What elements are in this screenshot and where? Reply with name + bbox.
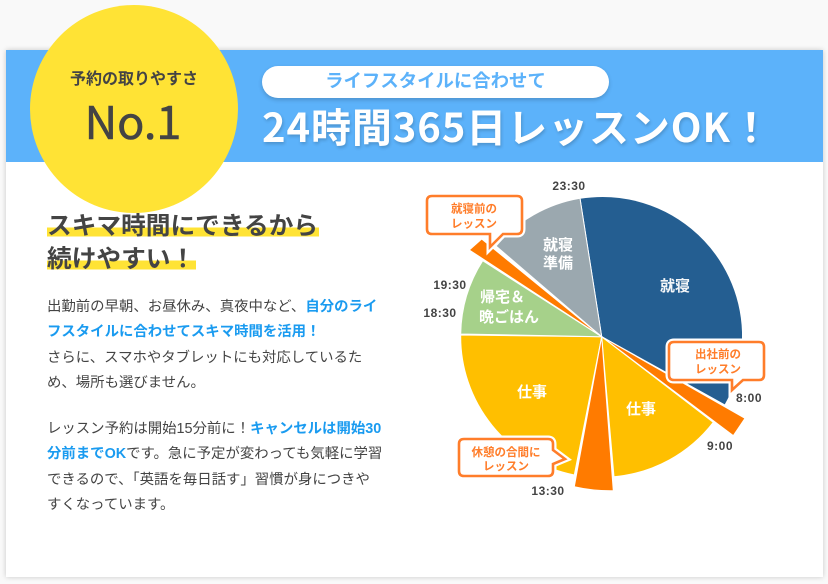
callout: during break (459, 439, 565, 476)
badge number: No.1 (85, 87, 181, 152)
body text: paragraph 1: 出勤前の早朝、お昼休み、真夜中など、自分のライ (47, 299, 377, 315)
section heading: 続けやすい！ (47, 239, 195, 275)
callout: before bed: 就寝前の (451, 202, 497, 216)
body text: paragraph 2: すくなっています。 (47, 497, 174, 513)
body text: paragraph 2: 分前までOKです。急に予定が変わっても気軽に学習 (47, 446, 382, 462)
subtitle pill: ライフスタイルに合わせて (325, 70, 546, 91)
slice: bedtime prep: 準備 (543, 254, 573, 272)
time labels: 23:30 (552, 179, 586, 193)
section heading: スキマ時間にできるから (47, 206, 318, 242)
slice: bedtime prep (496, 198, 602, 337)
time labels: 9:00 (707, 439, 733, 453)
callout: before bed: レッスン (451, 218, 497, 230)
header band (6, 50, 823, 162)
body text: paragraph 2: レッスン予約は開始15分前に！キャンセルは開始30 (47, 421, 381, 437)
time labels (423, 179, 762, 498)
slice: work morning: 仕事 (626, 400, 656, 418)
callout: during break: レッスン (483, 461, 529, 473)
body text: paragraph 2 (47, 420, 382, 513)
slice: home and dinner (461, 261, 602, 337)
time labels: 18:30 (423, 306, 457, 320)
body text: paragraph 1: さらに、スマホやタブレットにも対応しているた (47, 350, 362, 366)
orange wedge: before bed (469, 239, 602, 337)
callout: before work: 出社前の (695, 347, 741, 361)
callout: before bed (427, 196, 522, 247)
orange wedge: during break (574, 337, 613, 491)
callout: before work (669, 342, 764, 390)
badge caption: 予約の取りやすさ (70, 71, 198, 88)
callout: during break: 休憩の合間に (472, 445, 540, 459)
time labels: 13:30 (531, 484, 565, 498)
slice: home and dinner: 帰宅＆ (480, 288, 525, 306)
slice: work afternoon (461, 335, 602, 475)
body text: paragraph 1 (47, 298, 377, 391)
body text: paragraph 1: フスタイルに合わせてスキマ時間を活用！ (47, 324, 320, 340)
slice: sleep (580, 196, 742, 405)
slice: bedtime prep: 就寝 (543, 236, 573, 254)
slice: work morning (602, 337, 713, 477)
orange wedge: before work (602, 337, 745, 436)
body text: paragraph 2: できるので、「英語を毎日話す」習慣が身につきや (47, 472, 370, 488)
section heading (47, 206, 319, 275)
slice: sleep: 就寝 (660, 277, 690, 295)
badge: reservation No.1 (30, 5, 238, 213)
slice: work afternoon: 仕事 (517, 383, 547, 401)
body text: paragraph 1: め、場所も選びません。 (47, 375, 205, 391)
subtitle pill (262, 66, 609, 98)
time labels: 19:30 (433, 278, 467, 292)
slice: home and dinner: 晩ごはん (479, 308, 539, 326)
time labels: 8:00 (736, 391, 762, 405)
main title: 24時間365日レッスンOK！ (262, 96, 772, 154)
callout: before work: レッスン (695, 364, 741, 376)
